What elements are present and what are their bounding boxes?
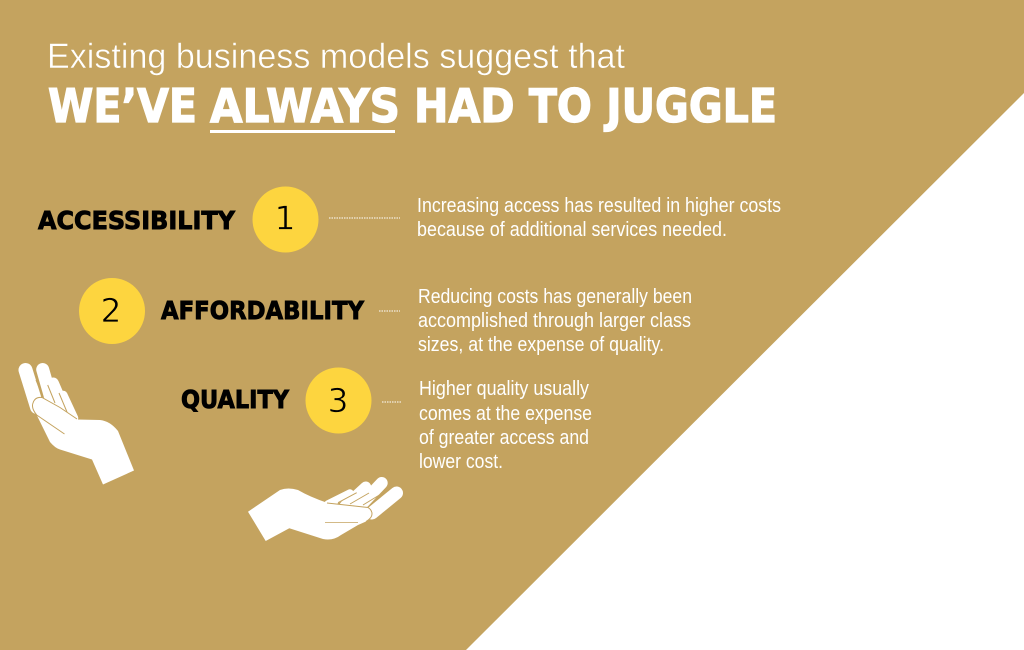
title line 2: WE’VE (48, 79, 197, 133)
description 2: Reducing costs has generally been (418, 286, 692, 308)
item 3: quality (181, 368, 592, 473)
description 3: comes at the expense (419, 403, 592, 425)
label: accessibility: ACCESSIBILITY (38, 206, 236, 235)
description 3: of greater access and (419, 427, 589, 449)
title line 1: Existing business models suggest that (47, 37, 625, 76)
number badge 2: 2 (100, 291, 122, 330)
connector 1 (329, 217, 400, 219)
description 1: because of additional services needed. (417, 219, 727, 241)
number badge 1 (252, 186, 318, 252)
connector 3 (382, 401, 401, 403)
item 2: affordability (79, 278, 692, 356)
title (47, 37, 777, 133)
connector 2 (379, 310, 400, 312)
description 2 (418, 286, 692, 356)
title line 2 (48, 79, 777, 133)
item 1: accessibility (38, 186, 781, 252)
label: affordability: AFFORDABILITY (161, 296, 365, 325)
title underline (210, 130, 395, 133)
description 1 (417, 195, 781, 241)
description 1: Increasing access has resulted in higher costs (417, 195, 781, 217)
label: quality: QUALITY (181, 385, 290, 414)
description 2: sizes, at the expense of quality. (418, 334, 664, 356)
number badge 1: 1 (274, 198, 296, 238)
description 2: accomplished through larger class (418, 310, 691, 332)
description 3: Higher quality usually (419, 378, 589, 400)
number badge 3 (306, 368, 372, 434)
icon: left hand (26, 370, 134, 484)
description 3 (419, 378, 592, 473)
description 3: lower cost. (419, 451, 503, 473)
number badge 2 (79, 278, 145, 344)
title line 2: HAD TO JUGGLE (414, 79, 777, 133)
number badge 3: 3 (328, 381, 348, 420)
title line 2: ALWAYS (210, 79, 400, 133)
icon: right hand (248, 483, 396, 541)
